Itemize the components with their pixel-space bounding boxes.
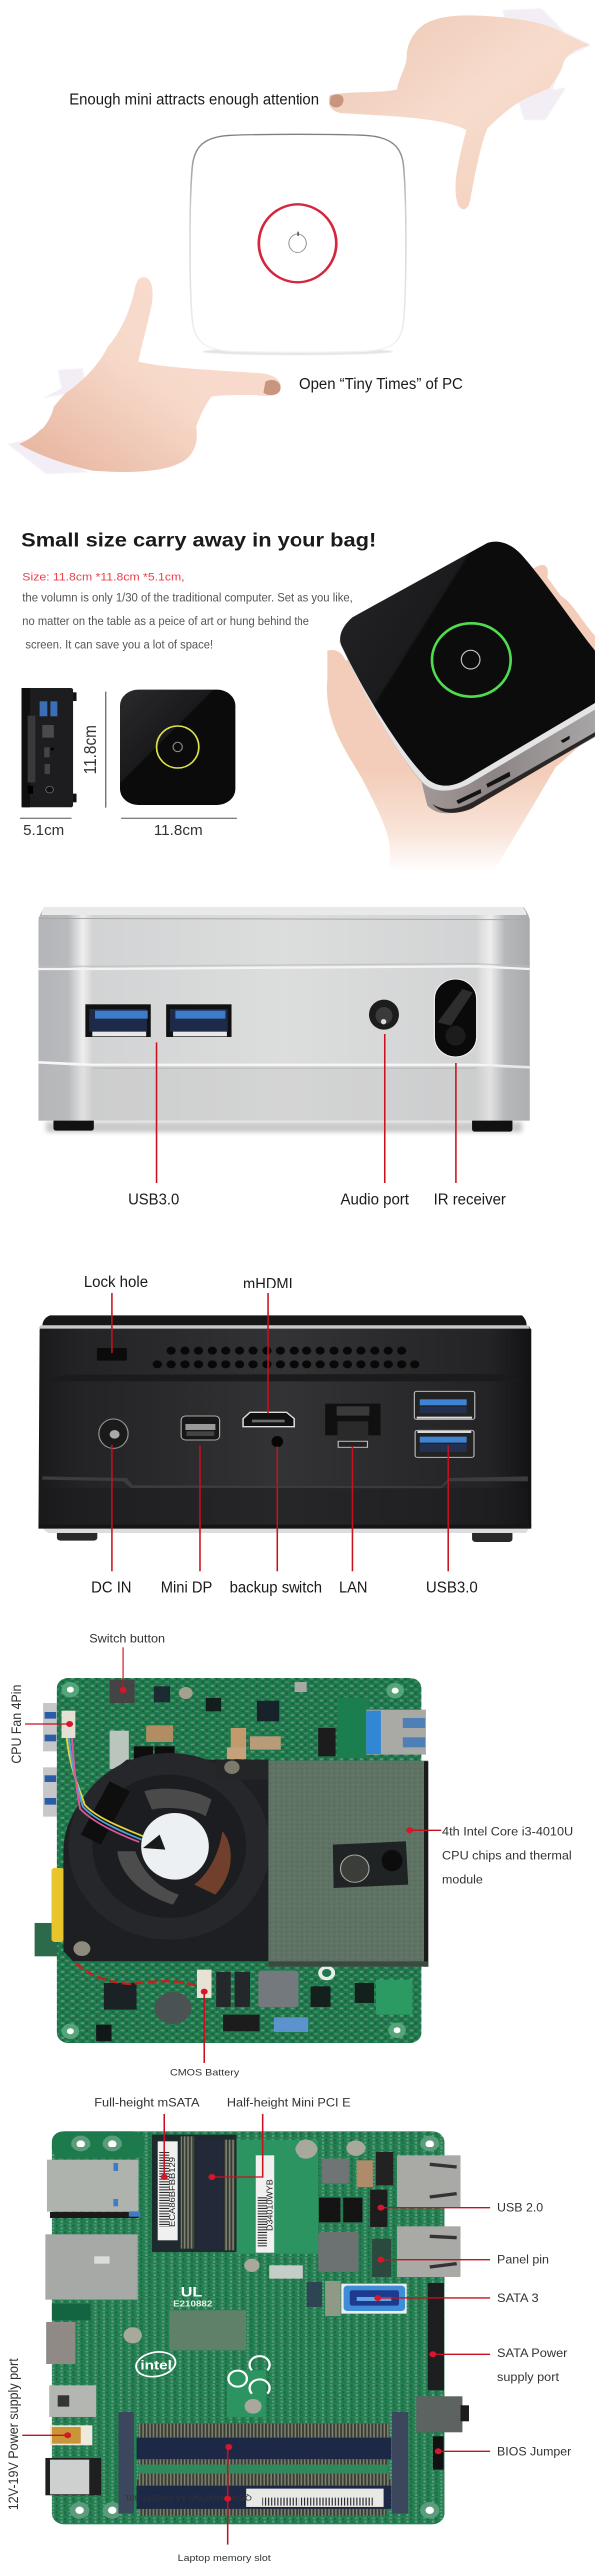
icon: dark seam bbox=[432, 732, 595, 813]
icon: green light ring bbox=[432, 623, 511, 697]
label: memory slot: Laptop memory slot bbox=[178, 2554, 271, 2564]
label: SATA 3: SATA 3 bbox=[497, 2291, 539, 2305]
icon: right ports bbox=[397, 2155, 469, 2432]
label: CPU description: module bbox=[442, 1873, 483, 1886]
icon: battery connector bbox=[197, 1970, 212, 1998]
line: Mini PCI E leader bbox=[208, 2114, 263, 2180]
label: audio port: Audio port bbox=[341, 1191, 409, 1208]
label: CPU description: 4th Intel Core i3-4010U bbox=[442, 1824, 573, 1838]
icon: lower USB port bbox=[415, 1430, 474, 1457]
icon: hand bbox=[327, 565, 595, 874]
icon: SATA power connector bbox=[428, 2283, 444, 2390]
icon: torn paper bottom left bbox=[8, 368, 88, 474]
icon: upper USB port bbox=[414, 1391, 475, 1419]
text: 5.1cm: 5.1cm bbox=[23, 823, 64, 839]
label: lock hole: Lock hole bbox=[84, 1273, 148, 1290]
icon: top right hand bbox=[329, 15, 589, 209]
label: SATA power: supply port bbox=[497, 2370, 559, 2384]
line: audio leader bbox=[383, 1034, 387, 1183]
label: DC IN: DC IN bbox=[91, 1579, 132, 1596]
line: memory leader bbox=[224, 2444, 232, 2545]
label: CMOS battery: CMOS Battery bbox=[170, 2068, 240, 2078]
label: Mini DP: Mini DP bbox=[161, 1579, 212, 1596]
icon: side connector bbox=[35, 1923, 62, 1956]
icon: torn paper top right bbox=[503, 8, 591, 120]
line: BIOS leader bbox=[435, 2448, 490, 2454]
line: LAN leader bbox=[350, 1446, 354, 1571]
label: CPU description: CPU chips and thermal bbox=[442, 1848, 572, 1862]
icon: intel logo bbox=[133, 2348, 179, 2380]
line: CPU leader bbox=[406, 1827, 441, 1833]
icon: right USB port bbox=[366, 1710, 426, 1755]
icon: screws bbox=[123, 2140, 366, 2414]
line: width dimension side bbox=[20, 817, 72, 820]
icon: UL certification: E210882 bbox=[173, 2299, 213, 2308]
icon: right foot bbox=[472, 1119, 512, 1132]
icon: device side band bbox=[339, 641, 595, 813]
line: SATA 3 leader bbox=[374, 2295, 490, 2301]
line: backup switch leader bbox=[275, 1446, 279, 1571]
icon: IR receiver bbox=[434, 979, 477, 1057]
icon: left foot bbox=[57, 1528, 97, 1541]
line: power supply leader bbox=[22, 2432, 71, 2438]
icon: LAN port bbox=[325, 1404, 381, 1447]
icon: intel logo: intel bbox=[140, 2359, 172, 2373]
icon: battery wire bbox=[76, 1963, 204, 1988]
icon: BIOS jumper bbox=[433, 2436, 444, 2470]
icon: top surface silver rim bbox=[339, 641, 595, 791]
label: LAN: LAN bbox=[339, 1579, 367, 1596]
line: height dimension bbox=[104, 692, 107, 808]
icon: mSATA slots: D34010WYB bbox=[265, 2179, 274, 2231]
icon: top right fingernail bbox=[330, 94, 344, 107]
heading: attention: Enough mini attracts enough attention bbox=[69, 91, 319, 108]
text: description: screen. It can save you a lot of space! bbox=[25, 638, 213, 651]
icon: fan wires bbox=[66, 1728, 143, 1842]
icon: yellow light ring bbox=[157, 726, 199, 768]
icon: silver chassis bbox=[38, 907, 530, 1121]
line: mHDMI leader bbox=[266, 1293, 270, 1413]
line: USB 2.0 leader bbox=[377, 2205, 490, 2211]
icon: side view of mini PC bbox=[22, 688, 77, 807]
icon: left silver ports bbox=[45, 2160, 140, 2495]
icon: battery bbox=[52, 1868, 64, 1942]
icon: mounting holes bbox=[64, 1684, 403, 2037]
label: USB3.0: USB3.0 bbox=[128, 1191, 179, 1208]
label: SATA power: SATA Power bbox=[497, 2346, 568, 2360]
icon: top view of black mini PC bbox=[120, 690, 235, 805]
icon: HDMI port bbox=[243, 1412, 294, 1427]
line: panel pin leader bbox=[377, 2257, 490, 2263]
icon: large power symbol bbox=[461, 650, 480, 669]
icon: mounting holes bbox=[73, 2138, 437, 2516]
text: size red: Size: 11.8cm *11.8cm *5.1cm, bbox=[22, 570, 185, 583]
icon: power components bbox=[269, 2152, 393, 2316]
text: height: 11.8cm bbox=[80, 725, 100, 774]
icon: memory label: QEWY34007ND AA G99257-301 bbox=[124, 2494, 252, 2502]
label: power supply: 12V-19V Power supply port bbox=[5, 2358, 21, 2510]
icon: bottom left fingernail bbox=[263, 380, 281, 395]
section: front view silver bbox=[38, 907, 530, 1208]
icon: red light ring bbox=[259, 204, 336, 282]
icon: small power symbol bbox=[173, 742, 182, 752]
section: rear view black bbox=[38, 1273, 531, 1596]
icon: fan and heatsink bbox=[63, 1753, 270, 1961]
line: SATA power leader bbox=[429, 2351, 490, 2357]
section: hands framing white mini PC bbox=[8, 8, 591, 474]
label: USB3.0 rear: USB3.0 bbox=[426, 1579, 478, 1596]
text: description bbox=[22, 590, 353, 651]
label: CPU fan: CPU Fan 4Pin bbox=[8, 1685, 24, 1764]
label: SATA power bbox=[497, 2346, 568, 2384]
line: IR leader bbox=[454, 1063, 458, 1183]
line: USB3.0 leader bbox=[155, 1042, 159, 1183]
label: Mini PCI E: Half-height Mini PCI E bbox=[227, 2095, 351, 2109]
label: mSATA: Full-height mSATA bbox=[94, 2095, 200, 2109]
line: lock hole leader bbox=[110, 1293, 114, 1353]
icon: UL certification bbox=[173, 2284, 213, 2308]
icon: vent holes bbox=[153, 1347, 419, 1368]
text: 11.8cm: 11.8cm bbox=[154, 823, 203, 839]
icon: white mini PC bbox=[190, 134, 406, 352]
line: Mini DP leader bbox=[198, 1446, 202, 1571]
icon: DC IN jack bbox=[99, 1419, 128, 1448]
label: switch button: Switch button bbox=[89, 1632, 165, 1645]
icon: Mini DP port bbox=[181, 1416, 220, 1440]
icon: mSATA slots: ECA86BFBB129 bbox=[168, 2156, 177, 2227]
icon: memory slots bbox=[118, 2412, 408, 2516]
icon: motherboard bbox=[57, 1678, 421, 2043]
label: USB 2.0: USB 2.0 bbox=[497, 2200, 543, 2214]
icon: black chassis bbox=[38, 1315, 531, 1533]
icon: USB port 2 bbox=[166, 1004, 232, 1037]
icon: right foot bbox=[472, 1528, 512, 1542]
line: mSATA leader bbox=[161, 2114, 168, 2180]
line: switch leader bbox=[120, 1647, 127, 1693]
label: IR receiver: IR receiver bbox=[434, 1191, 506, 1208]
section: motherboard with fan bbox=[8, 1632, 573, 2078]
heading: tiny times: Open “Tiny Times” of PC bbox=[300, 375, 463, 393]
icon: left foot bbox=[53, 1119, 94, 1131]
text: description: no matter on the table as a peice of art or hung behind the bbox=[22, 614, 309, 628]
icon: device shadow bbox=[202, 348, 393, 355]
label: backup switch: backup switch bbox=[230, 1579, 322, 1596]
section: motherboard underside bbox=[5, 2095, 572, 2564]
icon: UL certification: UL bbox=[181, 2284, 202, 2300]
line: DC IN leader bbox=[110, 1445, 114, 1571]
label: BIOS jumper: BIOS Jumper bbox=[497, 2444, 572, 2458]
icon: glossy top surface bbox=[340, 542, 595, 786]
icon: SATA 3 port bbox=[341, 2284, 407, 2314]
icon: audio port bbox=[369, 1000, 399, 1030]
heading: small size: Small size carry away in your bag! bbox=[21, 530, 376, 551]
icon: fan connector bbox=[62, 1711, 75, 1738]
icon: power symbol bbox=[289, 232, 306, 253]
icon: shadow bbox=[46, 1122, 522, 1132]
line: CMOS leader bbox=[201, 1989, 208, 2063]
section: small size bbox=[20, 530, 376, 839]
icon: lock hole bbox=[97, 1348, 127, 1361]
icon: motherboard bbox=[52, 2131, 444, 2524]
icon: CE mark bbox=[228, 2356, 270, 2394]
icon: card slots bbox=[456, 736, 570, 804]
label: CPU description bbox=[442, 1824, 573, 1886]
icon: bottom left hand bbox=[19, 277, 281, 472]
icon: left USB ports bbox=[43, 1703, 58, 1817]
line: USB3.0 leader bbox=[446, 1446, 450, 1571]
icon: thermal module bbox=[268, 1761, 428, 1967]
text: description: the volumn is only 1/30 of the traditional computer. Set as you like, bbox=[22, 590, 353, 604]
icon: mSATA slots bbox=[152, 2135, 274, 2253]
icon: USB port 1 bbox=[85, 1004, 151, 1037]
icon: hand holding black mini PC bbox=[327, 542, 595, 874]
line: fan leader bbox=[25, 1721, 73, 1727]
label: mHDMI: mHDMI bbox=[243, 1275, 293, 1292]
icon: backup switch hole bbox=[272, 1436, 283, 1447]
line: width dimension top bbox=[121, 817, 237, 820]
icon: memory label bbox=[124, 2489, 384, 2507]
label: panel pin: Panel pin bbox=[497, 2252, 549, 2266]
